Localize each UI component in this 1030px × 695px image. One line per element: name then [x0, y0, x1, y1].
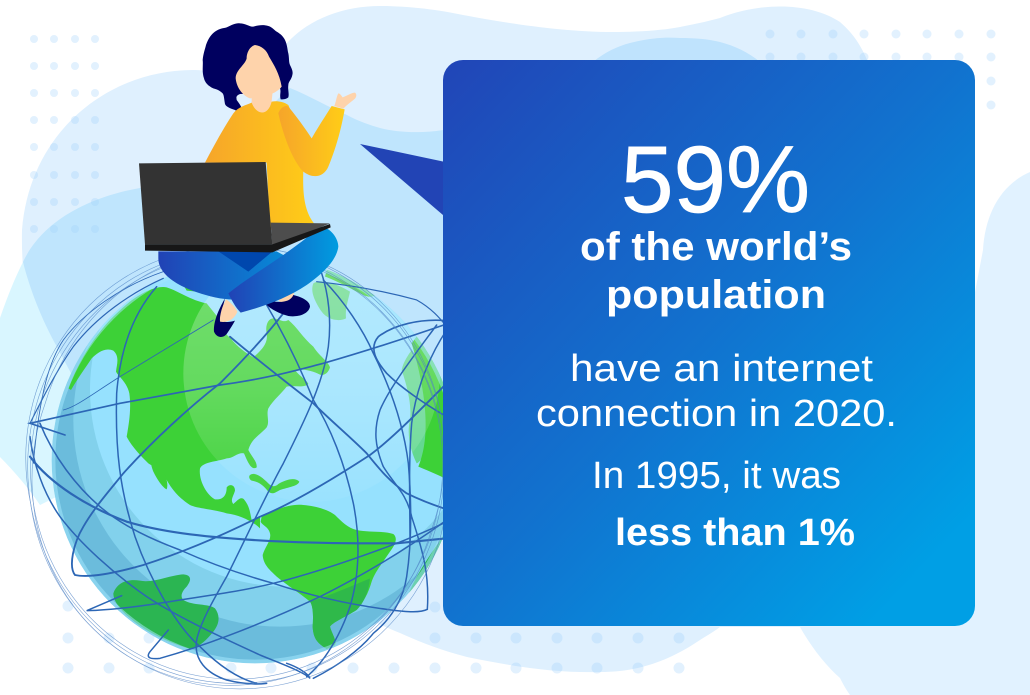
text: In 1995, it was: In 1995, it was: [592, 455, 841, 497]
speech bubble tail: [360, 144, 450, 221]
woman with laptop: [139, 23, 356, 337]
neck: [252, 92, 273, 114]
stat: 59%: 59%: [621, 127, 810, 233]
ocean: [52, 269, 443, 664]
text: have an internet connection in 2020: have an internet: [570, 348, 873, 390]
heading: of the world's population: [580, 225, 852, 317]
face: [236, 45, 282, 98]
raised arm: [278, 106, 345, 176]
network lines: [30, 272, 450, 684]
hair: [203, 23, 293, 117]
back leg: [158, 251, 317, 300]
right foot and shoe: [275, 293, 294, 305]
torso: [205, 101, 314, 230]
laptop deck: [271, 223, 330, 247]
heading: of the world's population: population: [606, 273, 826, 317]
laptop screen: [139, 162, 272, 244]
outer orbit rings: [26, 246, 449, 689]
front leg: [228, 227, 338, 313]
left foot and shoe: [214, 298, 235, 337]
landmasses: [68, 264, 460, 649]
text: have an internet connection in 2020: connection in 2020.: [536, 393, 897, 435]
highlight: [53, 245, 457, 662]
text: have an internet connection in 2020: [536, 348, 897, 435]
text: less than 1%: less than 1%: [615, 512, 855, 554]
globe with network lines: [25, 250, 443, 690]
laptop edge: [145, 224, 331, 252]
heading: of the world's population: of the world’s: [580, 225, 852, 269]
speech bubble card: [443, 60, 975, 626]
hand: [334, 93, 356, 109]
